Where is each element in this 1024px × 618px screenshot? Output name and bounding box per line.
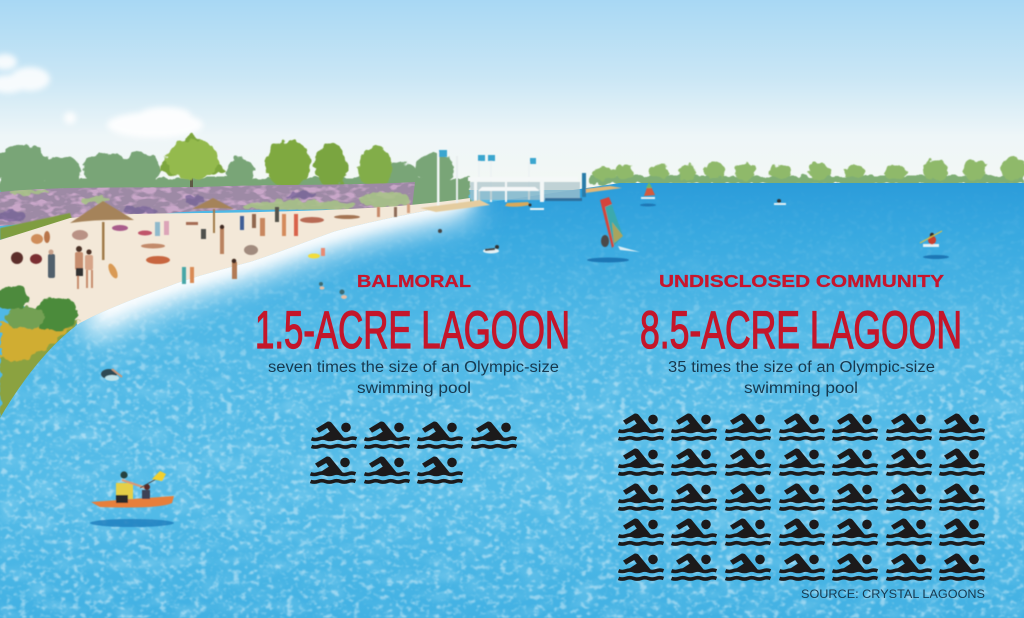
label: Balmoral: BALMORAL bbox=[357, 271, 471, 291]
lagoon water bbox=[0, 183, 1024, 618]
kayak bbox=[90, 471, 174, 527]
description: 35 times: 35 times the size of an Olympic-size bbox=[668, 359, 935, 376]
panel: undisclosed community bbox=[618, 271, 984, 579]
windsurfer: main bbox=[587, 197, 640, 262]
description: seven times bbox=[268, 359, 559, 397]
far treeline bbox=[590, 157, 1024, 184]
source credit: SOURCE: CRYSTAL LAGOONS bbox=[801, 589, 985, 601]
pictogram: seven pools bbox=[310, 422, 516, 482]
beach umbrellas and people bbox=[11, 198, 410, 289]
swimmer, lower left bbox=[101, 369, 122, 381]
hedge bbox=[0, 213, 72, 240]
sky bbox=[0, 0, 1024, 190]
description: seven times: seven times the size of an Olympic-size bbox=[268, 359, 559, 376]
heading: 1.5-acre lagoon: 1.5-ACRE LAGOON bbox=[255, 301, 570, 360]
marina: flags and pavilion bbox=[420, 150, 622, 212]
purple flower band bbox=[0, 182, 415, 226]
beach backdrop: trees, flowers, hedge bbox=[0, 132, 470, 240]
garden bed, lower left bbox=[0, 286, 80, 420]
cloud: centre left bbox=[64, 107, 203, 138]
umbrella: small bbox=[192, 198, 234, 233]
background trees bbox=[0, 145, 470, 208]
windsurfer: distant bbox=[640, 182, 656, 206]
beachgoers bbox=[11, 204, 410, 289]
description: 35 times bbox=[668, 359, 935, 397]
pictogram: thirty-five pools bbox=[618, 414, 984, 579]
sand bbox=[0, 198, 470, 330]
small boats and swimmers, far water bbox=[308, 199, 949, 299]
foreground trees bbox=[158, 132, 392, 198]
label: undisclosed community: UNDISCLOSED COMMUNITY bbox=[659, 271, 944, 291]
shoreline foam bbox=[85, 198, 470, 325]
description: seven times: swimming pool bbox=[357, 380, 471, 397]
cloud: left edge bbox=[0, 54, 50, 93]
umbrella: large bbox=[70, 201, 134, 260]
panel: Balmoral bbox=[255, 271, 570, 482]
description: 35 times: swimming pool bbox=[744, 380, 858, 397]
